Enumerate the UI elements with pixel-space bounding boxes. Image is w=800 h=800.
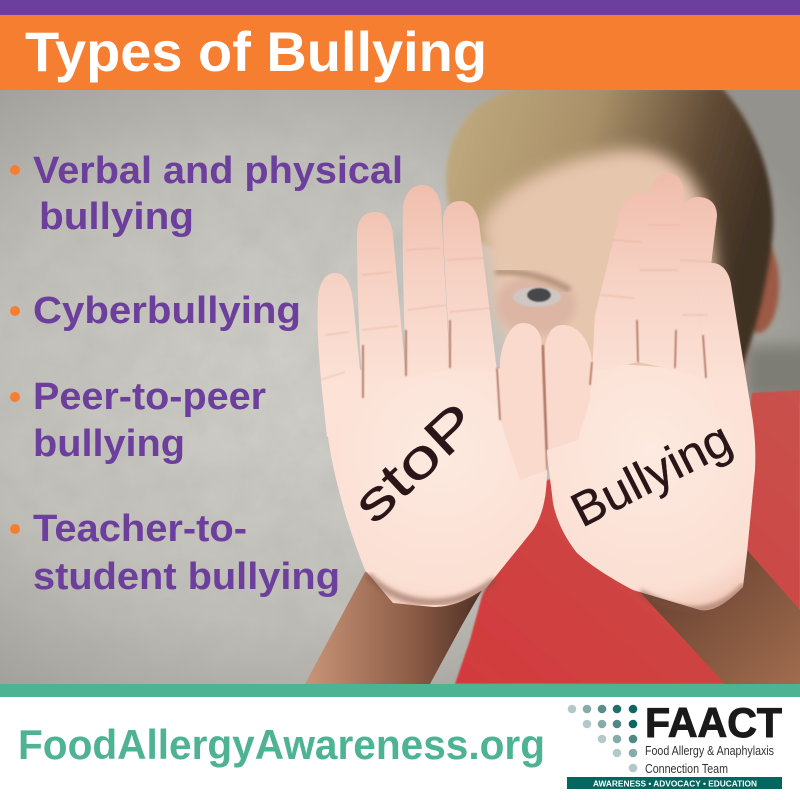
neck shadow	[744, 358, 747, 382]
concrete wall	[0, 90, 800, 684]
photo: boy showing hands	[0, 88, 800, 684]
logo tagline bar: AWARENESS • ADVOCACY • EDUCATION	[593, 778, 757, 788]
wrist shadow	[368, 575, 495, 602]
top purple band	[0, 0, 800, 15]
item: peer-to-peer	[10, 376, 266, 465]
left thumb side shadow	[542, 345, 547, 470]
right ring finger	[675, 197, 717, 380]
left middle finger	[403, 185, 450, 378]
item: teacher-to-student: Teacher-to-	[33, 508, 247, 550]
red shirt	[455, 390, 800, 684]
item: peer-to-peer: Peer-to-peer	[33, 376, 266, 418]
right finger gaps	[543, 320, 706, 450]
left arm	[305, 572, 482, 684]
right arm	[640, 550, 800, 684]
footer panel	[0, 697, 800, 800]
left thumb	[500, 323, 547, 480]
logo tagline bar	[567, 777, 782, 789]
item: verbal and physical: bullying	[39, 196, 194, 238]
website url: FoodAllergyAwareness.org	[18, 721, 545, 768]
right index finger	[592, 193, 648, 372]
logo name: Food Allergy & Anaphylaxis	[645, 744, 774, 758]
logo wordmark: FAACT	[645, 699, 782, 746]
arms	[305, 550, 800, 684]
right finger joints	[600, 225, 712, 315]
teal divider band	[0, 684, 800, 697]
title: Types of Bullying	[25, 20, 487, 83]
left pinky	[318, 273, 363, 437]
item: verbal and physical: Verbal and physical	[33, 150, 403, 192]
right palm	[545, 351, 756, 610]
title banner	[0, 15, 800, 90]
eye	[513, 287, 561, 307]
handwriting: Bullying: Bullying	[563, 412, 740, 538]
logo dot pattern	[568, 705, 637, 772]
face	[482, 149, 725, 420]
item: teacher-to-student	[10, 508, 340, 598]
eyebrow	[495, 272, 570, 290]
right middle finger	[635, 173, 684, 370]
FAACT logo: Connection Team	[645, 762, 728, 776]
left hand	[318, 185, 547, 607]
item: teacher-to-student: student bullying	[33, 556, 340, 598]
wrist shadow	[640, 585, 745, 610]
item: verbal and physical	[10, 150, 403, 238]
left palm	[327, 368, 547, 607]
right pinky	[697, 263, 750, 402]
right hand	[543, 173, 755, 610]
left finger gaps	[363, 320, 500, 420]
hair	[446, 88, 773, 380]
left index finger	[443, 201, 497, 372]
list: types of bullying	[10, 150, 403, 598]
item: peer-to-peer: bullying	[33, 423, 185, 465]
FAACT logo	[567, 699, 782, 789]
eye socket	[496, 275, 576, 335]
left finger joints	[320, 248, 492, 380]
item: cyberbullying: Cyberbullying	[33, 290, 301, 332]
handwriting: Stop: stoP	[341, 391, 489, 535]
left ring finger	[357, 212, 405, 370]
ear	[752, 244, 782, 336]
right thumb	[545, 325, 592, 450]
boy's head	[446, 88, 779, 420]
